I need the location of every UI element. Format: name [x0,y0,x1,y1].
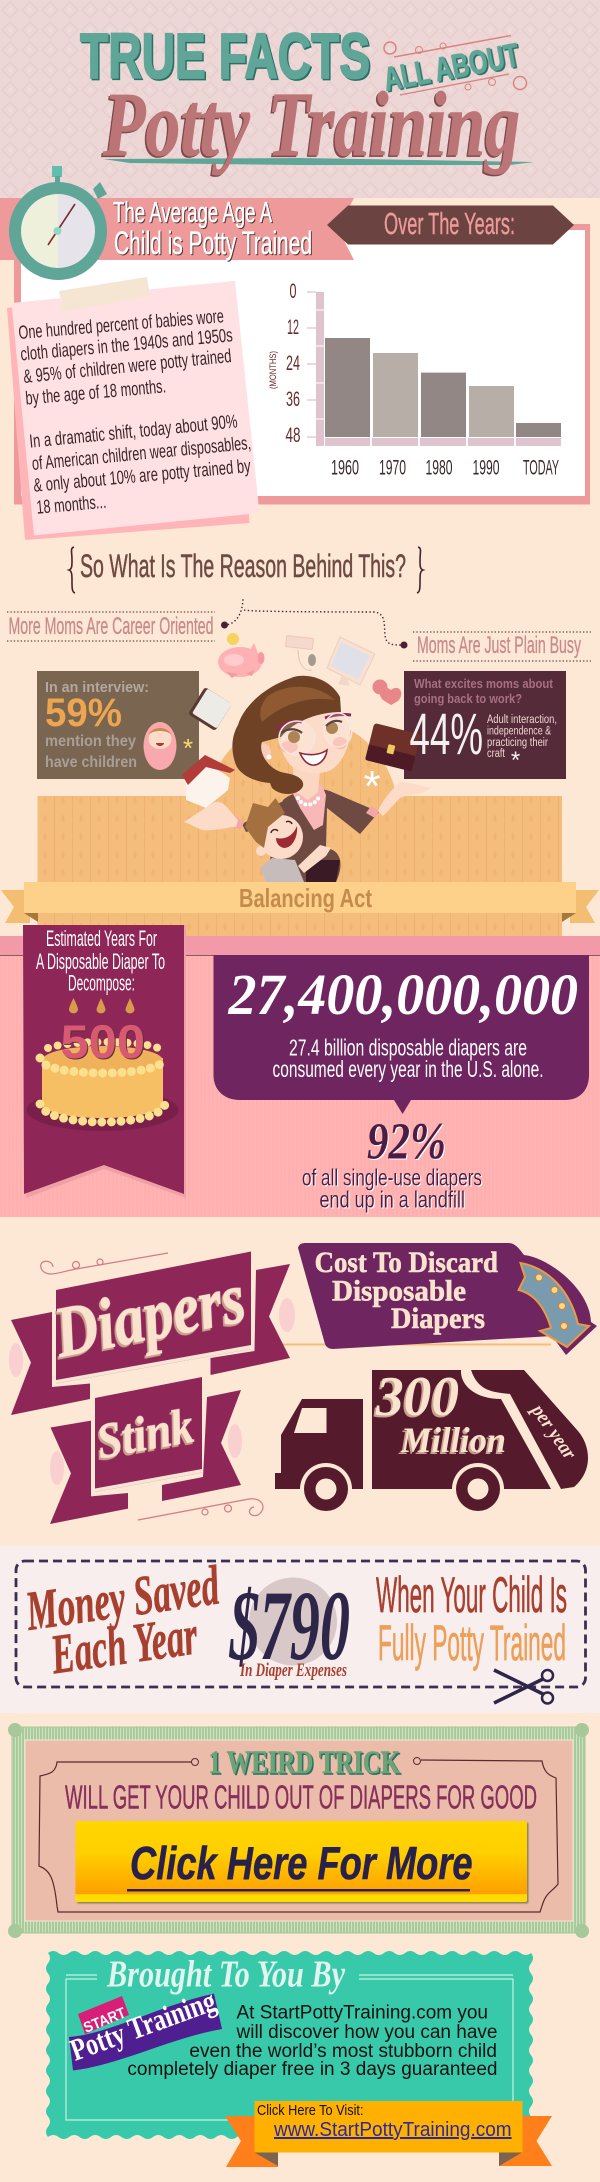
y axis: 24 [286,352,300,375]
stat: 92 percent landfill [302,1114,482,1212]
text: adult interaction: craft [487,748,506,760]
callout text [272,1034,544,1082]
button: click here: Click Here For More [130,1837,473,1889]
banner text: Decompose: [68,970,135,996]
illustration: mother and child [182,676,430,882]
banner: average age ribbon [0,197,354,261]
text: site description: even the world’s most stubborn child [189,2041,497,2062]
text: what excites moms: going back to work? [414,691,522,706]
flourishes and flowers around ribbons [9,1253,295,1520]
text: in an interview: In an interview: [45,679,149,696]
banner: balancing act [1,882,599,923]
logo: start potty training [65,1983,222,2070]
logo: start potty training: Potty Training [65,1983,221,2068]
text: adult interaction: Adult interaction, [487,714,557,726]
callout text: Disposable [332,1274,466,1308]
title: all about with flourishes [380,36,526,98]
banner text: Click Here To Visit: [257,2103,364,2119]
title: brush stroke [103,158,534,165]
banner: average age ribbon: Child is Potty Trained [114,225,312,261]
icon: tape [59,277,150,312]
icon: yellow asterisk: * [183,733,193,763]
icon: white asterisk: * [511,747,520,774]
icon: garbage truck: per year [526,1399,581,1464]
stat: 92 percent landfill: of all single-use diapers [302,1165,482,1191]
panel: weird trick certificate [8,1723,589,1938]
heading: brought to you by: Brought To You By [106,1954,345,1996]
text: site description: At StartPottyTraining.com you [236,2003,488,2024]
icon: swaddled baby [144,722,176,770]
woman head [232,676,352,794]
panel: diaper statistics background [0,936,600,1217]
banner: over the years [327,206,574,244]
icon: birthday cake [26,998,178,1131]
callout: diapers consumed [214,955,589,1114]
bars [325,338,561,446]
ribbon: diapers [11,1252,290,1415]
truck text: 300 [375,1366,459,1428]
truck body [372,1370,551,1489]
icon: curved arrow with bulbs [519,1263,589,1347]
banner: visit website [225,2101,552,2167]
subheading: career oriented: More Moms Are Career Oriented [8,613,213,640]
x axis labels: 1960 [331,456,359,480]
x axis labels: 1970 [379,456,406,480]
x axis labels: TODAY [523,456,559,480]
callout text: Diapers [391,1302,485,1335]
note text: & 95% of children were potty trained [22,346,232,388]
icon: desktop monitor [327,637,375,686]
title: true facts: TRUE FACTS [80,20,370,92]
icon: garbage truck [275,1366,588,1515]
panel: career stat [37,671,199,779]
note text: One hundred percent of babies wore [18,306,225,344]
text: money saved each year: Money Saved [22,1554,224,1643]
icon: piggy bank [218,633,264,678]
stat: 92 percent landfill: 92% [367,1114,446,1170]
text: when your child is fully potty trained [376,1567,567,1671]
decoration line: cost section [283,1344,551,1346]
text: adult interaction: practicing their [487,737,548,749]
truck cab [275,1399,363,1489]
panel: money saved coupon [0,1546,600,1713]
panel: chart frame [14,224,590,504]
text: mention they have children: mention they [45,733,136,750]
stat: 92 percent landfill: end up in a landfill [320,1186,465,1212]
note text: of American children wear disposables, [31,433,252,475]
y axis: (MONTHS) [268,351,279,389]
subheading: career oriented [7,612,228,641]
wheels [300,1463,352,1515]
x axis labels: 1990 [472,456,500,480]
heading: reason behind this [69,547,423,593]
note text: cloth diapers in the 1940s and 1950s [20,325,234,365]
icon: tablet [188,687,232,731]
text: adult interaction: independence & [487,726,551,738]
right arm and hand [366,806,379,818]
text: 1 weird trick: 1 WEIRD TRICK [208,1745,400,1781]
ribbon: diapers: Diapers [47,1258,252,1373]
heading: reason behind this: So What Is The Reason Behind This? [80,548,406,584]
note text: & only about 10% are potty trained by [33,456,252,497]
bar chart: age potty trained [268,280,561,480]
connector: dotted lines [224,597,402,645]
x axis labels: 1980 [426,456,452,480]
text: mention they have children [45,733,137,771]
child [245,798,331,882]
text: what excites moms [414,676,554,706]
callout text [315,1246,498,1335]
left arm and hand [242,800,285,832]
text: adult interaction [487,714,557,760]
banner: visit website: www.StartPottyTraining.com [273,2119,512,2141]
banner: years to decompose [23,925,186,1198]
icon: house [182,755,235,808]
title: all about with flourishes: ALL ABOUT [380,36,522,98]
background: balancing act panel [38,717,562,937]
ribbon text: The Average Age A [113,197,272,229]
text: site description [127,2003,498,2080]
text: site description: will discover how you can have [235,2022,498,2043]
banner: balancing act: Balancing Act [239,883,372,913]
text: money saved each year [22,1554,224,1686]
banner text: Estimated Years For [46,926,157,951]
banner text: A Disposable Diaper To [36,949,165,974]
ribbon: stink [50,1377,241,1524]
icon: garbage truck: Million [400,1420,506,1460]
panel: header [0,0,600,198]
banner text [36,926,165,996]
text: mention they have children: have children [45,754,137,771]
ribbon: stink: Stink [92,1397,197,1469]
icon: briefcase [365,723,421,771]
y axis [268,280,324,447]
y axis: 0 [290,280,296,303]
icon: scissors [494,1670,553,1704]
text: money saved each year: Each Year [47,1604,202,1686]
note text: In a dramatic shift, today about 90% [28,411,239,453]
x axis labels [331,456,559,480]
stat: 790 dollars: In Diaper Expenses [239,1660,347,1681]
icon: stopwatch [9,166,107,280]
panel: busy stat [404,671,566,779]
icon: white flower: * [363,762,381,811]
note text: 18 months... [36,492,107,519]
stat: 790 dollars [228,1570,350,1681]
icon: mouse [298,650,312,670]
y axis: 36 [286,388,300,411]
corner ornaments [8,1723,589,1938]
icon: heart bubble [372,680,401,705]
callout text: Cost To Discard [315,1246,498,1279]
button: click here [75,1821,527,1902]
stat: 44 percent: 44% [410,702,483,767]
note text: by the age of 18 months. [25,376,167,410]
certificate outline [39,1760,558,1912]
callout: cost to discard [298,1243,597,1355]
note text [18,306,252,519]
stat: 59 percent: 59% [45,691,122,735]
panel: brought to you by [46,1951,533,2139]
note: cloth diapers facts [7,277,260,540]
stat: 790 dollars: $790 [228,1570,350,1681]
text: site description: completely diaper free in 3 days guaranteed [127,2059,498,2080]
logo: start potty training: START [81,2004,128,2037]
stat: 500: 500 [60,1015,145,1068]
woman body [184,762,430,882]
text: what excites moms: What excites moms about [414,676,554,691]
y axis: 48 [286,424,300,447]
icon: keyboard [286,636,316,670]
stat: 27.4 billion: 27,400,000,000 [228,962,578,1027]
y axis: 12 [287,316,299,339]
